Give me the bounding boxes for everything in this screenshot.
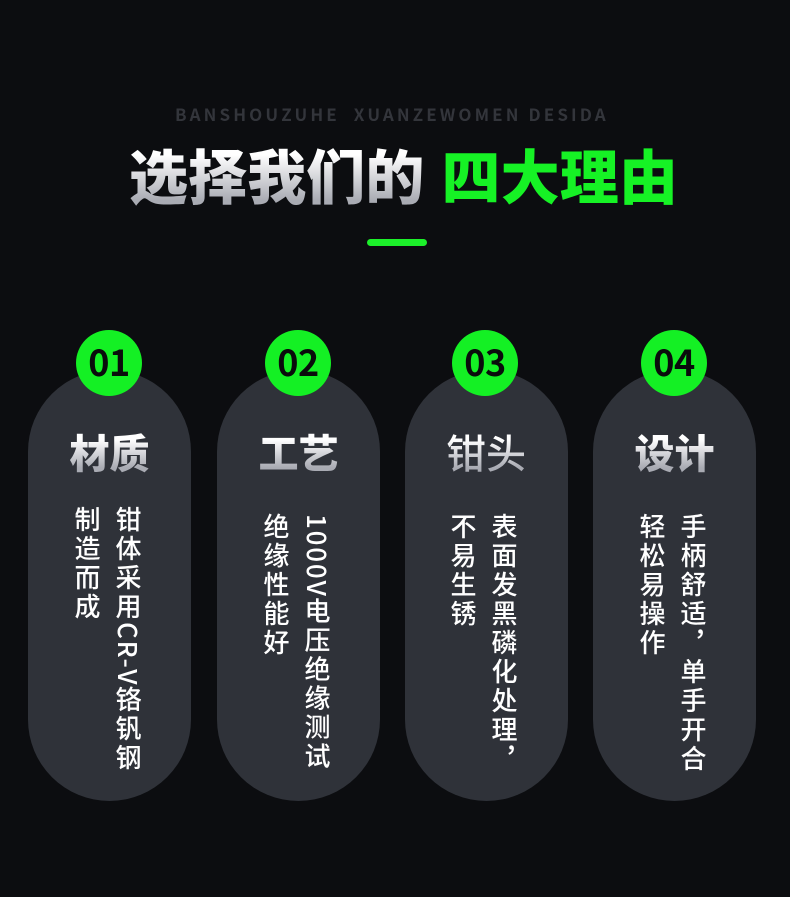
heading: material: 材质 (70, 422, 150, 480)
heading: design: 设计 (634, 422, 714, 480)
text: card 1 column 2: 制造而成 (69, 506, 106, 622)
text: card 4 column 2: 轻松易操作 (634, 513, 671, 658)
badge 02: 02 (277, 335, 319, 387)
heading: jaw: 钳头 (446, 422, 526, 480)
badge 01 (76, 330, 142, 396)
text: card 1 column 1: 钳体采用 CR-V 铬钒钢 (110, 506, 147, 773)
panel: card 2 craft (217, 370, 380, 801)
badge 01: 01 (88, 335, 130, 387)
heading: craft: 工艺 (258, 422, 338, 480)
heading: jaw (404, 425, 568, 477)
heading: craft (217, 425, 380, 477)
badge 03 (452, 330, 518, 396)
text: card 2 column 2: 绝缘性能好 (258, 513, 295, 658)
green accent bar (367, 239, 427, 246)
text: card 2 column 1: 1000V 电压绝缘测试 (299, 514, 336, 772)
title: 选择我们的 四大理由 (129, 131, 678, 216)
text: card 3 column 2: 不易生锈 (445, 513, 482, 629)
panel: card 3 jaw (404, 370, 568, 801)
text: card 4 column 1: 手柄舒适，单手开合 (675, 513, 712, 774)
panel: card 4 design (593, 370, 756, 801)
heading: design (593, 425, 756, 477)
heading: material (28, 425, 191, 477)
text: card 3 column 1: 表面发黑磷化处理， (486, 513, 523, 774)
badge 03: 03 (464, 335, 506, 387)
panel: card 1 material (28, 370, 191, 801)
badge 02 (265, 330, 331, 396)
subtitle: pinyin line: BANSHOUZUHE XUANZEWOMEN DESIDA (175, 101, 609, 126)
badge 04 (641, 330, 707, 396)
badge 04: 04 (653, 335, 695, 387)
